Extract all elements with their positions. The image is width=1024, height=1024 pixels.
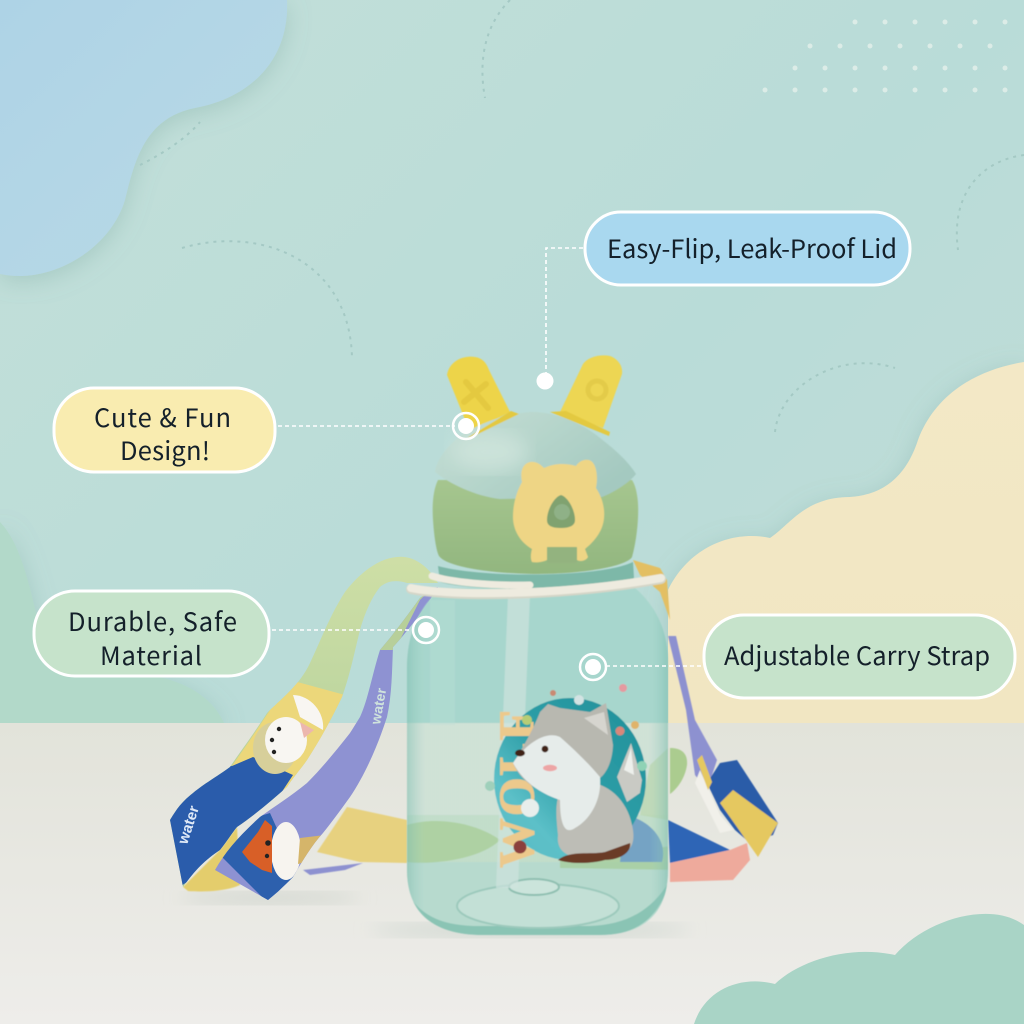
connector: strap [606,665,703,667]
icon: rabbit on strap [253,695,323,774]
callout: Cute & Fun Design!: Design! [120,431,210,468]
bear clasp [513,460,604,562]
strap: left long loop: water [174,804,203,847]
lid top [435,412,636,499]
callout: Durable, Safe Material: Material [100,636,202,673]
callout: Durable, Safe Material [34,591,269,676]
lid highlight [452,432,528,472]
decorative cloud: green left [0,522,225,725]
bottle back strap: yellow tab [633,560,670,620]
strap ring [411,576,661,594]
connector: lid [546,248,583,376]
hotspot: design [453,413,479,439]
decorative dots [762,20,1008,92]
ear collars [467,411,519,438]
bottle [400,355,680,942]
callout: Cute & Fun Design!: Cute & Fun [94,398,231,435]
connector: material [272,629,414,631]
shadow under bottle [370,923,690,937]
callout: Adjustable Carry Strap [704,615,1015,698]
strap: right side [668,636,778,882]
callout: Adjustable Carry Strap: Adjustable Carry Strap [724,636,990,673]
hotspot: lid [536,372,554,390]
wolf lettering: WOLF [488,710,544,868]
callout: Easy-Flip, Leak-Proof Lid: Easy-Flip, Leak-Proof Lid [607,229,897,266]
wolf [513,703,642,863]
icon: fox on strap [242,820,325,880]
shadow under straps [180,892,360,904]
callout: Durable, Safe Material: Durable, Safe [68,602,237,639]
clasp hole [547,495,575,528]
hotspot: strap [580,654,606,680]
decorative cloud: teal bottom right [694,914,1024,1024]
strap: under yellow band [183,807,407,891]
wolf badge circle [494,698,646,860]
hotspot: material [413,617,439,643]
decorative cloud: blue top left [0,0,287,276]
lid base [433,480,638,574]
strap: left purple loop [215,587,438,900]
connector: design [278,425,455,427]
latch [547,547,577,563]
right ear [560,355,622,428]
callout: Cute & Fun Design! [54,388,275,472]
table surface [0,723,1024,1024]
glass body [400,585,680,942]
strap: left purple loop: water [367,686,389,727]
neck [438,562,634,589]
bubbles [485,684,647,854]
base ring [457,884,619,928]
left ear [447,357,510,432]
strap: left long loop [170,556,438,887]
decorative cloud: yellow right [668,362,1024,730]
straw [496,595,530,888]
callout: Easy-Flip, Leak-Proof Lid [585,212,910,285]
